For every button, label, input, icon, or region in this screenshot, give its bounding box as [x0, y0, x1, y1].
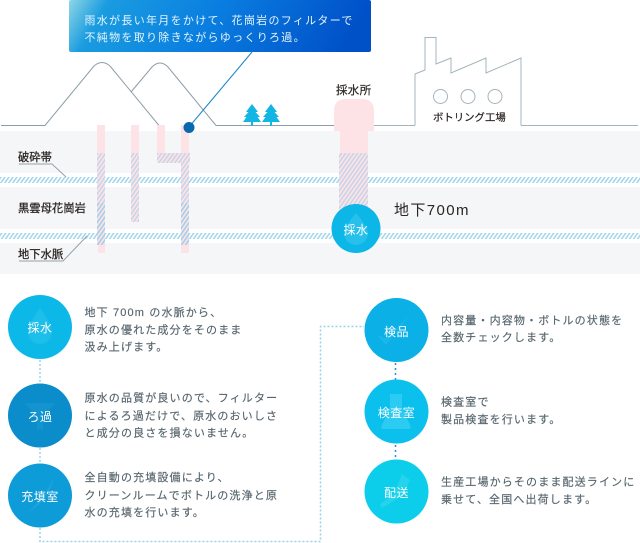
label: water intake: 採水所: [336, 83, 372, 97]
step 4: quality check: [364, 298, 623, 362]
step 2: filtration: 原水の品質が良いので、フィルター: [84, 390, 278, 404]
step 4: quality check: 内容量・内容物・ボトルの状態を: [441, 313, 623, 327]
step 3: filling room: [8, 464, 278, 528]
label: fracture zone: [18, 150, 66, 177]
step 3: filling room: クリーンルームでボトルの洗浄と原: [84, 488, 278, 502]
step 2: filtration: [8, 384, 278, 448]
step 3: filling room: 充填室: [21, 490, 59, 504]
step 5: inspection room: 検査室で: [441, 394, 490, 408]
callout: rainwater filtering: 不純物を取り除きながらゆっくりろ過。: [84, 30, 306, 44]
step 1: water intake: 採水: [27, 321, 53, 335]
label: groundwater vein: 地下水脈: [18, 247, 63, 261]
step 5: inspection room: [364, 380, 561, 444]
depth label: 地下700m: [394, 202, 470, 219]
step 4: quality check: 全数チェックします。: [441, 330, 561, 344]
step 6: delivery: 乗せて、全国へ出荷します。: [441, 492, 597, 506]
step 3: filling room: 全自動の充填設備により、: [84, 470, 230, 484]
step 2: filtration: ろ過: [27, 410, 53, 424]
callout: rainwater filtering: 雨水が長い年月をかけて、花崗岩のフィルターで: [84, 13, 354, 27]
label: biotite granite: 黒雲母花崗岩: [18, 201, 86, 215]
map badge: water intake: 採水: [343, 223, 369, 237]
map badge: water intake: [332, 204, 380, 253]
water intake facility: [334, 99, 374, 213]
label: groundwater vein: [18, 236, 87, 261]
step 1: water intake: 地下 700m の水脈から、: [84, 305, 222, 319]
ground strata bands: [0, 131, 640, 274]
step 1: water intake: 汲み上げます。: [84, 340, 168, 354]
step 5: inspection room: 検査室: [378, 406, 415, 420]
step 4: quality check: 検品: [384, 325, 409, 339]
step 6: delivery: [364, 460, 635, 524]
mountains and ground line: [1, 62, 374, 126]
step 6: delivery: 生産工場からそのまま配送ラインに: [441, 474, 635, 488]
step 5: inspection room: 製品検査を行います。: [441, 412, 561, 426]
dotted flow connector: [40, 326, 396, 542]
label: fracture zone: 破砕帯: [18, 150, 52, 164]
pipes: rainwater infiltration: [97, 125, 190, 253]
step 1: water intake: 原水の優れた成分をそのまま: [84, 324, 242, 336]
step 2: filtration: によるろ過だけで、原水のおいしさ: [84, 410, 278, 422]
step 3: filling room: 水の充填を行います。: [84, 505, 205, 519]
icon: trees: [243, 104, 280, 126]
step 1: water intake: [8, 295, 242, 359]
label: bottling factory: ボトリング工場: [433, 111, 506, 124]
step 2: filtration: と成分の良さを損ないません。: [84, 426, 254, 440]
callout: rainwater filtering: [69, 0, 371, 133]
factory outline: [374, 38, 638, 126]
step 6: delivery: 配送: [384, 485, 409, 500]
